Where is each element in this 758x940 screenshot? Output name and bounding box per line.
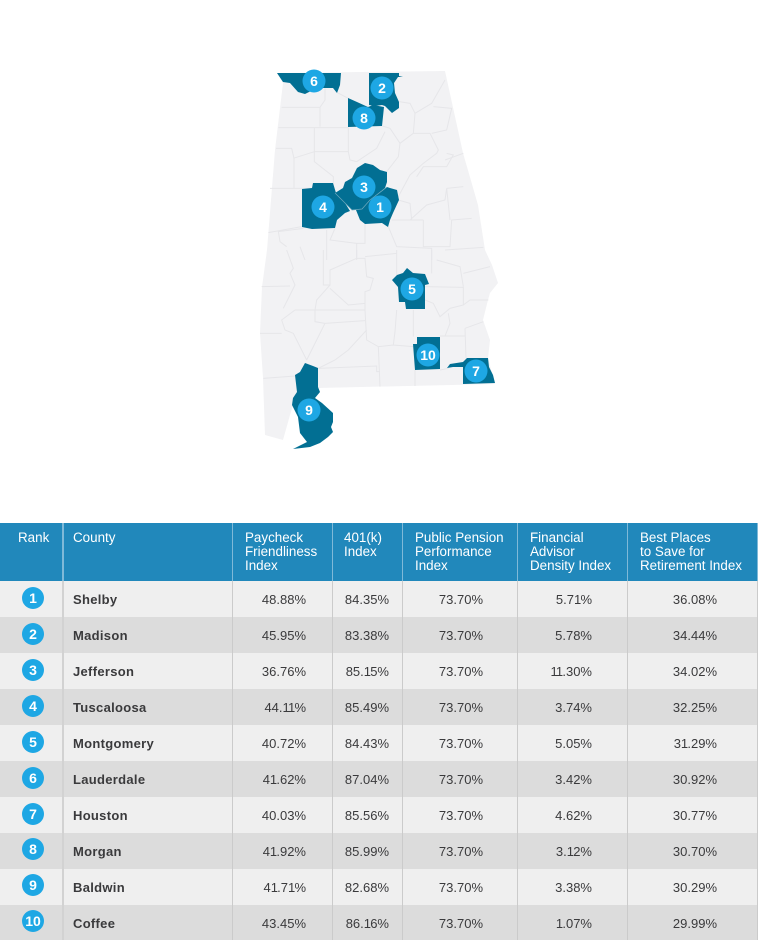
row 1: Shelby: 84.35% bbox=[345, 592, 389, 607]
county: Houston bbox=[447, 358, 495, 384]
row 7: Houston bbox=[0, 797, 758, 833]
column heading: Public Pension Performance Index bbox=[415, 530, 504, 573]
row 9: Baldwin: 41.71% bbox=[263, 880, 306, 895]
row 9: Baldwin: 9 bbox=[29, 877, 37, 893]
marker 6: 6 bbox=[310, 73, 318, 89]
row 7: Houston: 85.56% bbox=[345, 808, 389, 823]
county: Morgan bbox=[348, 98, 384, 127]
column heading: Best Places to Save for Retirement Index bbox=[640, 530, 742, 573]
column heading: Best Places to Save for Retirement Index: to Save for bbox=[640, 544, 705, 559]
row 6: Lauderdale: 3.42% bbox=[555, 772, 592, 787]
border between Tuscaloosa, Jefferson and Shelby bbox=[335, 187, 387, 210]
row 9: Baldwin bbox=[0, 869, 758, 905]
marker 1 bbox=[368, 196, 392, 218]
row 10: Coffee: Coffee bbox=[73, 916, 115, 931]
row 8: Morgan: 85.99% bbox=[345, 844, 389, 859]
row 6: Lauderdale: 6 bbox=[29, 770, 37, 786]
row 9: Baldwin: 73.70% bbox=[439, 880, 483, 895]
marker 3: 3 bbox=[360, 179, 368, 195]
marker 7: 7 bbox=[472, 363, 480, 379]
column heading: County: County bbox=[73, 530, 115, 545]
county: Lauderdale bbox=[277, 73, 341, 94]
column heading: Financial Advisor Density Index: Density Index bbox=[530, 558, 611, 573]
row 10: Coffee: 86.16% bbox=[346, 916, 389, 931]
county: Tuscaloosa bbox=[302, 183, 350, 229]
column heading: Paycheck Friendliness Index bbox=[245, 530, 317, 573]
column heading: Best Places to Save for Retirement Index: Retirement Index bbox=[640, 558, 742, 573]
row 7: Houston: Houston bbox=[73, 808, 128, 823]
row 6: Lauderdale bbox=[0, 761, 758, 797]
marker 9: 9 bbox=[305, 402, 313, 418]
column heading: Paycheck Friendliness Index: Index bbox=[245, 558, 278, 573]
row 2: Madison: 2 bbox=[29, 626, 37, 642]
marker 3 bbox=[352, 176, 376, 198]
row 5: Montgomery bbox=[0, 725, 758, 761]
marker 5 bbox=[400, 278, 424, 300]
marker 4 bbox=[312, 196, 334, 218]
row 5: Montgomery: 40.72% bbox=[262, 736, 306, 751]
row 1: Shelby: 73.70% bbox=[439, 592, 483, 607]
row 7: Houston: 30.77% bbox=[673, 808, 717, 823]
column heading: Public Pension Performance Index: Public Pension bbox=[415, 530, 504, 545]
row 4: Tuscaloosa: 3.74% bbox=[555, 700, 592, 715]
row 8: Morgan: 73.70% bbox=[439, 844, 483, 859]
row 3: Jefferson: 34.02% bbox=[673, 664, 717, 679]
row 10: Coffee: 10 bbox=[25, 913, 41, 929]
row 10: Coffee bbox=[0, 905, 758, 940]
row 5: Montgomery: Montgomery bbox=[73, 736, 154, 751]
column heading: Financial Advisor Density Index: Financial bbox=[530, 530, 584, 545]
marker 7 bbox=[464, 360, 488, 382]
ranking table bbox=[0, 523, 758, 940]
row 6: Lauderdale: 87.04% bbox=[345, 772, 389, 787]
marker 2 bbox=[370, 76, 394, 100]
row 2: Madison: 73.70% bbox=[439, 628, 483, 643]
row 3: Jefferson: 3 bbox=[29, 662, 37, 678]
row 1: Shelby: Shelby bbox=[73, 592, 117, 607]
row 1: Shelby: 5.71% bbox=[556, 592, 592, 607]
row 9: Baldwin: Baldwin bbox=[73, 880, 125, 895]
row 4: Tuscaloosa: 73.70% bbox=[439, 700, 483, 715]
marker 10 bbox=[416, 344, 440, 366]
row 2: Madison: Madison bbox=[73, 628, 128, 643]
county: Montgomery bbox=[392, 268, 429, 309]
marker 6 bbox=[302, 70, 326, 92]
row 4: Tuscaloosa: 32.25% bbox=[673, 700, 717, 715]
row 4: Tuscaloosa bbox=[0, 689, 758, 725]
row 8: Morgan: 30.70% bbox=[673, 844, 717, 859]
row 2: Madison bbox=[0, 617, 758, 653]
marker 8 bbox=[352, 106, 376, 130]
row 7: Houston: 40.03% bbox=[262, 808, 306, 823]
row 6: Lauderdale: 73.70% bbox=[439, 772, 483, 787]
column heading: Paycheck Friendliness Index: Paycheck bbox=[245, 530, 303, 545]
row 3: Jefferson: 36.76% bbox=[262, 664, 306, 679]
row 7: Houston: 73.70% bbox=[439, 808, 483, 823]
column heading: 401(k) Index: 401(k) bbox=[344, 530, 382, 545]
row 5: Montgomery: 73.70% bbox=[439, 736, 483, 751]
row 8: Morgan: Morgan bbox=[73, 844, 122, 859]
county: Shelby bbox=[356, 187, 399, 227]
county borders bbox=[268, 80, 483, 260]
county: Coffee bbox=[413, 337, 440, 370]
row 10: Coffee: 1.07% bbox=[556, 916, 592, 931]
marker 1: 1 bbox=[376, 199, 384, 215]
row 3: Jefferson: 85.15% bbox=[346, 664, 389, 679]
column heading: 401(k) Index bbox=[344, 530, 382, 559]
marker 2: 2 bbox=[378, 80, 386, 96]
row 7: Houston: 7 bbox=[29, 806, 37, 822]
row 4: Tuscaloosa: Tuscaloosa bbox=[73, 700, 147, 715]
row 8: Morgan: 8 bbox=[29, 841, 37, 857]
row 6: Lauderdale: 41.62% bbox=[263, 772, 306, 787]
row 2: Madison: 5.78% bbox=[555, 628, 592, 643]
column heading: Rank: Rank bbox=[18, 530, 49, 545]
row 5: Montgomery: 84.43% bbox=[345, 736, 389, 751]
column heading: Best Places to Save for Retirement Index: Best Places bbox=[640, 530, 711, 545]
row 1: Shelby: 1 bbox=[29, 590, 37, 606]
row 6: Lauderdale: 30.92% bbox=[673, 772, 717, 787]
table header bbox=[0, 523, 758, 581]
row 3: Jefferson: 73.70% bbox=[439, 664, 483, 679]
row 2: Madison: 34.44% bbox=[673, 628, 717, 643]
row 1: Shelby bbox=[0, 581, 758, 617]
row 3: Jefferson: Jefferson bbox=[73, 664, 134, 679]
row 10: Coffee: 43.45% bbox=[262, 916, 306, 931]
marker 4: 4 bbox=[319, 199, 327, 215]
row 3: Jefferson bbox=[0, 653, 758, 689]
row 2: Madison: 45.95% bbox=[262, 628, 306, 643]
row 3: Jefferson: 11.30% bbox=[550, 664, 592, 679]
column heading: Public Pension Performance Index: Performance bbox=[415, 544, 492, 559]
row 6: Lauderdale: Lauderdale bbox=[73, 772, 145, 787]
row 5: Montgomery: 31.29% bbox=[674, 736, 717, 751]
map of Alabama bbox=[260, 70, 498, 449]
column heading: Financial Advisor Density Index bbox=[530, 530, 611, 573]
county: Jefferson bbox=[335, 163, 387, 210]
row 9: Baldwin: 3.38% bbox=[555, 880, 592, 895]
row 2: Madison: 83.38% bbox=[345, 628, 389, 643]
marker 10: 10 bbox=[420, 347, 436, 363]
row 8: Morgan bbox=[0, 833, 758, 869]
county: Baldwin bbox=[292, 363, 333, 449]
marker 5: 5 bbox=[408, 281, 416, 297]
marker 8: 8 bbox=[360, 110, 368, 126]
row 4: Tuscaloosa: 44.11% bbox=[264, 700, 306, 715]
marker 9 bbox=[298, 398, 320, 422]
row 4: Tuscaloosa: 4 bbox=[29, 698, 37, 714]
column heading: Financial Advisor Density Index: Advisor bbox=[530, 544, 575, 559]
column heading: Public Pension Performance Index: Index bbox=[415, 558, 448, 573]
row 10: Coffee: 73.70% bbox=[439, 916, 483, 931]
row 5: Montgomery: 5 bbox=[29, 734, 37, 750]
row 4: Tuscaloosa: 85.49% bbox=[345, 700, 389, 715]
column heading: 401(k) Index: Index bbox=[344, 544, 377, 559]
row 7: Houston: 4.62% bbox=[555, 808, 592, 823]
row 9: Baldwin: 30.29% bbox=[673, 880, 717, 895]
row 8: Morgan: 41.92% bbox=[263, 844, 306, 859]
row 9: Baldwin: 82.68% bbox=[345, 880, 389, 895]
row 8: Morgan: 3.12% bbox=[556, 844, 592, 859]
county: Madison bbox=[369, 73, 403, 113]
column heading: Paycheck Friendliness Index: Friendliness bbox=[245, 544, 317, 559]
row 10: Coffee: 29.99% bbox=[673, 916, 717, 931]
row 1: Shelby: 36.08% bbox=[673, 592, 717, 607]
state outline bbox=[260, 71, 498, 440]
row 5: Montgomery: 5.05% bbox=[555, 736, 592, 751]
row 1: Shelby: 48.88% bbox=[262, 592, 306, 607]
